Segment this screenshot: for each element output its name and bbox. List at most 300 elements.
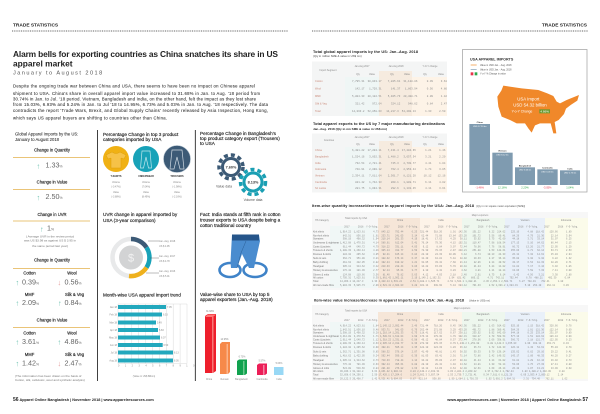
table 1: Qty <box>356 73 361 76</box>
heading: categories imported by USA <box>103 137 162 142</box>
change in value by fibre: ↓ <box>58 359 61 368</box>
table 2: Jan-Aug 2017 <box>355 136 370 139</box>
change in UVR: ↑ <box>40 224 44 234</box>
panel: India fact <box>200 212 281 277</box>
donut labels: Jan.-Aug. 2017 <box>159 255 176 258</box>
table 2: Y-O-Y change <box>423 136 438 139</box>
table 4: 2017 2018 Y-O-Ychg. 2017 2018 Y-O-Ychg. 2017 2018 Y-O-Ychg. 2017 2018 Y-O-Ychg. 2017 2018 Y-O-Ychg. 2017 2018 Y-O-Ychg. <box>340 319 578 322</box>
table title <box>313 50 418 58</box>
icon: value gear: 7.60% <box>226 166 237 170</box>
bar labels: USD 8.12 bn <box>496 155 509 157</box>
table 2: Cambodia <box>315 180 327 184</box>
legend: Value in USD Jan. - Aug. 2018 <box>480 64 512 67</box>
gear captions: Value data <box>216 184 232 188</box>
table 1 <box>312 62 447 116</box>
3D bar chart <box>205 310 284 381</box>
change in value by fibre: MMF <box>25 352 35 357</box>
intro paragraph: Despite the ongoing trade war between China and USA, there seems to have been no impact on Chinese apparel <box>13 84 255 88</box>
bar chart: 7.05 <box>167 306 172 309</box>
table 2: India <box>315 161 321 165</box>
table 4: Sweaters <box>313 332 324 334</box>
heading: Fact: India stands at fifth rank in cotton <box>200 212 281 217</box>
table 3: 508.19 498.32 1.94 210.14 201.33 4.19 18.41 17.62 4.29 38.11 35.92 5.75 42.60 44.18 3.71 33.14 31.07 6.25 <box>340 238 572 240</box>
table 4: Baby clothing <box>313 354 329 358</box>
category labels and figures: T-SHIRTS <box>111 175 122 178</box>
footnote: Cotton, silk, cellulosic, wool and synthetic analysis) <box>15 378 85 382</box>
table 3: Vietnam <box>521 219 529 222</box>
change in quantity by fibre: 0.56% <box>64 278 82 286</box>
change in value by fibre: Change in Value <box>37 318 68 322</box>
table 4: Underwear & nightwear <box>313 335 339 338</box>
bar chart: Aug 18 <box>109 360 118 362</box>
category labels and figures: Volume <box>112 181 121 184</box>
footnote: (The information has been drawn on the basis of <box>15 374 81 378</box>
change in quantity by fibre: Cotton <box>23 270 36 276</box>
table 4: 3,508.19 3,498.32 0.28 1,210.14 1,201.33 0.73 118.41 117.62 0.67 238.11 235.92 0.92 642.60 644.18 0.25 233.14 231.07 0.89 <box>340 332 572 334</box>
table 1: Wool <box>315 86 321 90</box>
bar chart: 8.13 <box>174 352 179 354</box>
table 4: 1,305.11 1,314.62 0.73 710.33 718.44 1.14 34.22 35.03 2.37 40.18 41.44 3.14 61.02 61.81 1.29 16.44 16.32 0.73 <box>340 359 572 362</box>
table 2: Bangladesh <box>315 154 329 158</box>
table 1: 5,804.33 20,122.51 5,925.73 20,408.71 2.09 1.42 <box>352 95 447 98</box>
change in quantity by fibre: 0.39% <box>22 278 39 286</box>
bar chart: Apr 18 <box>110 329 118 332</box>
change in quantity <box>13 148 90 170</box>
table 4: China <box>397 313 404 316</box>
left page header: TRADE STATISTICS <box>13 22 59 28</box>
table 3: 124.08 119.66 3.56 81.40 76.82 5.63 4.12 4.03 2.18 2.40 2.61 8.75 6.14 6.42 4.56 3.21 3.30 2.80 <box>340 274 572 276</box>
change in value by fibre: 3.61% <box>22 337 39 346</box>
table 2: 821.42 1,742.33 860.1 1,808.71 6.11 4.02 <box>352 181 446 184</box>
table 4: 776.42 781.30 0.63 392.14 395.61 0.88 28.10 28.41 1.10 14.62 14.81 1.30 52.14 53.06 1.76 27.33 27.11 0.80 <box>340 363 572 366</box>
table 1: 7,795.31 30,043.17 7,825.61 31,128.86 0.39 3.61 <box>352 80 447 83</box>
change in quantity: ↑ <box>36 162 40 170</box>
table 3: India <box>438 219 444 222</box>
category labels and figures <box>111 175 184 198</box>
table 1: Value <box>369 73 376 76</box>
change in value: Change in Value <box>37 180 68 184</box>
subtitle: January to August 2018 <box>13 70 104 76</box>
table 3: 7,795.31 7,825.61 0.39 1,861.42 1,902.11 2.19 1,140.2 1,162.31 1.94 821.42 860.12 4.71 742.11 792.44 6.78 488.21 492.30 0.84 <box>340 276 571 280</box>
table 2: Value <box>438 143 445 146</box>
bar chart: (Value in US$ Billion) <box>133 375 155 378</box>
table 3: Sweaters <box>313 238 324 240</box>
table 3: Dresses & skirts <box>313 253 332 256</box>
table 4: 4,914.22 4,823.61 1.84 2,145.12 2,092.44 2.46 721.44 718.20 0.45 542.36 551.22 1.63 914.62 925.10 1.15 318.42 320.66 0.70 <box>340 324 572 328</box>
change in value by fibre: Cotton <box>23 330 36 336</box>
table 3: All man-made fibre <box>313 284 335 287</box>
icon: blue rings <box>220 263 266 277</box>
table 2: 732.54 2,721.41 745.3 2,730.77 4.41 1.04 <box>352 162 446 165</box>
change in value by fibre: 2.47% <box>64 358 82 368</box>
table 3: 418.62 422.05 0.82 192.44 190.12 1.21 31.05 33.41 7.60 21.14 22.86 8.14 40.52 43.17 6.54 18.33 18.20 0.71 <box>340 261 572 264</box>
heading: Percentage Change in Bangladesh's <box>200 131 276 136</box>
table 2: Qty <box>423 143 428 146</box>
bar chart: Mar 18 <box>110 322 118 324</box>
table title: Total apparel exports to the US by 7 major manufacturing destinations <box>313 122 445 126</box>
bar labels: USD 2.73 bn <box>564 172 577 174</box>
change in quantity by fibre: ↓ <box>58 278 61 287</box>
panel dividers <box>98 130 195 381</box>
table 4: Major exporters <box>454 307 471 310</box>
table 3: Trousers & shorts <box>313 249 333 252</box>
table 1: 142.17 1,720.31 141.37 1,803.94 0.56 4.86 <box>352 88 447 90</box>
intro paragraph <box>13 84 269 120</box>
table 1: Value <box>438 73 445 76</box>
heading: apparel exporters (Jan.-Aug. 2018) <box>200 297 273 302</box>
bar percentage changes: 12.16% <box>498 185 507 189</box>
donut labels: Jan.-Aug. 2018 <box>159 240 176 243</box>
table 2: Indonesia <box>315 167 327 171</box>
change in UVR: Change in UVR <box>37 212 67 217</box>
table 3: 362.71 351.08 3.21 188.32 176.14 6.47 11.40 10.81 5.18 18.92 19.33 2.17 36.14 35.02 3.10 9.10 9.22 1.32 <box>340 257 572 260</box>
table 2: Countries <box>324 139 335 142</box>
table 3: 14,063.2 14,217.3 1.33 4,420.14 4,531.22 2.51 1,488.2 1,525.71 2.52 1,524.1 1,488.21 2.36 2,354.1 2,501.71 6.27 748.91 762.41 1.80 <box>340 280 564 283</box>
legend: Y-o-Y % Change in value <box>480 74 507 76</box>
change in UVR: 1% <box>47 224 54 232</box>
table title <box>313 122 445 131</box>
table 2: Value <box>369 143 376 146</box>
table 4: 2,611.44 2,640.72 1.12 1,318.22 1,331.11 0.98 49.12 48.84 0.57 272.44 278.06 2.06 358.91 366.72 2.18 121.77 122.05 0.23 <box>340 338 572 342</box>
change in value by fibre: 4.86% <box>64 337 82 346</box>
bar labels <box>473 122 577 174</box>
bar chart: Jan 18 <box>110 306 118 309</box>
table 4: Dresses & skirts <box>313 346 332 349</box>
bar labels: Cambodia <box>542 167 553 169</box>
intro paragraph: from 15.03%, 6.93% and 5.24% in Jan. to Jul '18 to 14.95%, 6.73% and 5.03% in Jan. to Aug. '18 respectively. The data <box>13 102 269 107</box>
icon: volume gear: 8.13% <box>248 180 259 184</box>
table block: total global imports <box>312 50 447 116</box>
category labels and figures: TROUSERS <box>170 175 184 178</box>
table 4: All cotton <box>313 370 324 373</box>
left footer: 56 Apparel Online Bangladesh | November 2018 | www.apparelresources.com <box>13 397 154 403</box>
3D bar chart: Cambodia <box>257 378 268 381</box>
category labels and figures: (-2.16%) <box>172 196 182 198</box>
table 2: Jan-Aug 2018 <box>389 136 404 139</box>
table 3 <box>312 212 588 290</box>
panel: month-wise imports <box>103 292 200 378</box>
table title: (Qty in million SME & value in US$ mn) <box>313 54 362 58</box>
change in UVR: the same period last year) <box>32 244 68 248</box>
table 1: Y-O-Y change <box>423 65 438 68</box>
map of USA: Y-o-Y Change <box>512 109 533 113</box>
table 4: Headgear <box>313 359 324 362</box>
right footer: www.apparelresources.com | November 2018 | Apparel Online Bangladesh 57 <box>446 397 588 403</box>
change in value by fibre: ↑ <box>16 338 19 346</box>
intro paragraph: which says US apparel buyers are shifting to countries other than China. <box>13 116 167 120</box>
table 2: 2,354.11 7,611.64 2,501.7 8,121.20 10.12 12.16 <box>352 174 446 178</box>
table 3: Indonesia <box>561 219 572 222</box>
table 4: 30,043.1 31,128.8 3.61 4,861.42 4,902.11 0.84 2,140.2 2,162.31 1.03 2,821.4 2,860.12 1.37 2,742.1 2,792.44 1.83 1,488.2 1,492.30 0.28 <box>340 370 565 373</box>
change in UVR: was US $3.98 as against US $ 3.95 in <box>24 238 76 242</box>
change in value by fibre: ↑ <box>16 359 19 368</box>
title: Alarm bells for exporting countries as China snatches its share in US <box>13 49 278 59</box>
table 2: Qty <box>356 143 361 146</box>
table 3: China <box>397 219 404 222</box>
table 3: 611.44 640.72 4.79 318.22 331.11 4.05 9.12 8.84 3.07 72.44 78.06 7.76 58.91 66.72 13.26 21.77 22.05 1.29 <box>340 246 572 248</box>
change in quantity by fibre <box>13 258 90 308</box>
table 3: Hosiery & accessories <box>313 269 338 272</box>
title: apparel market <box>13 58 73 68</box>
category labels and figures: (7.04%) <box>142 186 150 188</box>
category labels and figures: Volume <box>173 181 182 184</box>
panel: top 3 product categories <box>103 132 190 198</box>
legend <box>470 58 514 76</box>
bar labels: USD 3.03 bn <box>541 171 554 173</box>
table 1: Import Segment <box>319 69 337 72</box>
bar chart: 6.07 <box>161 336 166 340</box>
table 3: All cotton <box>313 276 324 280</box>
map of USA: USA Import <box>517 97 540 102</box>
table 4 <box>312 305 588 381</box>
table 3: 305.11 314.62 3.12 210.33 218.44 3.86 14.22 15.03 5.70 20.18 21.44 6.24 11.02 11.81 7.17 6.44 6.32 1.86 <box>340 265 572 268</box>
table block: item-wise quantity <box>312 204 588 290</box>
table 4: 52,858.6 54,290.1 2.50 17,420.1 17,204.6 1.24 3,602.3 3,657.54 1.53 2,730.7 2,721.41 0.34 7,611.6 8,121.20 6.69 2,953.4 2,890.12 2.14 <box>340 374 564 376</box>
table 1: Silk & Veg <box>315 102 327 106</box>
table 4: All man-made fibre <box>313 378 335 380</box>
bar chart: Jul 18 <box>111 352 118 354</box>
table 3: 176.42 181.30 2.77 92.14 95.61 3.77 8.10 8.41 3.83 4.62 4.81 4.11 12.14 13.06 7.58 7.33 7.11 3.00 <box>340 269 572 272</box>
table 3: 2017 2018 Y-O-Ychg. 2017 2018 Y-O-Ychg. 2017 2018 Y-O-Ychg. 2017 2018 Y-O-Ychg. 2017 2018 Y-O-Ychg. 2017 2018 Y-O-Ychg. <box>340 226 578 228</box>
donut labels: Jan.-Aug. 2016 <box>159 270 176 273</box>
table 3: 284.10 295.62 4.05 98.41 105.14 6.84 22.10 24.33 10.09 6.12 6.74 10.13 24.33 26.11 7.32 14.61 15.04 2.94 <box>340 253 572 256</box>
donut labels <box>146 240 176 278</box>
table 4: Total imports by USA <box>345 310 368 312</box>
table 1: Qty <box>423 73 428 76</box>
table 1: Jan-Aug 2018 <box>389 65 404 68</box>
table 1: 14,063.2 52,858.63 14,217.3 54,290.13 1.33 2.50 <box>352 110 446 113</box>
donut labels: US $ 5.01 <box>159 275 170 278</box>
change in quantity by fibre: Wool <box>67 270 77 276</box>
3D bar chart: 14.95% <box>220 338 229 341</box>
table 4: Vietnam <box>521 313 529 316</box>
icon: t-shirts circle <box>103 146 129 172</box>
category labels and figures: Value <box>113 191 120 194</box>
heading: UVR change in apparel imported by <box>103 212 177 217</box>
panel: USA apparel imports map <box>462 50 587 192</box>
right page header: TRADE STATISTICS <box>542 22 588 28</box>
bar chart: 6.50 <box>164 344 169 347</box>
table 4: Hosiery & accessories <box>313 363 338 366</box>
icon: underwear circle <box>133 146 159 172</box>
table 3: 842.51 856.10 1.61 233.71 241.05 3.14 62.44 71.08 13.84 153.20 161.72 5.56 80.41 84.26 4.79 21.30 22.14 3.94 <box>340 234 572 238</box>
change in value by fibre: Wool <box>67 330 77 336</box>
table 3: Total <box>313 280 319 283</box>
table 3: HS Category <box>315 219 330 222</box>
table title: Item-wise value increase/decrease in apparel imports by the USA: Jan.-Aug. 2018 <box>314 298 464 302</box>
panel: value-wise share <box>200 292 284 381</box>
3D bar chart: 5.03% <box>276 362 283 365</box>
intro paragraph: contradicts the report 'Trade Wars, Brexit, and Global Supply Chains' recently released by Asia Inspection, Hong Kong, <box>13 108 268 113</box>
change in quantity by fibre: ↑ <box>16 278 19 287</box>
title <box>13 49 278 68</box>
table 2: 1,524.16 3,602.31 1,488.2 3,657.54 3.21 2.20 <box>352 156 446 158</box>
table 3: 1,914.22 1,823.61 4.73 845.12 792.44 6.23 321.44 318.20 1.01 142.36 151.22 6.22 214.62 225.10 4.88 118.42 120.66 1.89 <box>340 230 572 234</box>
bar percentage changes: 2.20% <box>521 185 529 189</box>
table 4: 2,842.51 2,856.10 0.48 933.71 941.05 0.79 262.44 271.08 3.29 453.20 461.72 1.88 380.41 384.26 1.01 121.30 122.14 0.69 <box>340 328 572 332</box>
table 4: Coats & jackets <box>313 338 331 342</box>
table 2: China <box>315 148 322 152</box>
table 4: 1,418.62 1,422.05 0.24 592.44 590.12 0.39 81.05 83.41 2.91 71.14 72.86 2.42 140.52 143.17 1.89 48.33 48.20 0.27 <box>340 354 572 358</box>
change in quantity by fibre: ↑ <box>58 298 62 308</box>
table 3: 1,412.08 1,470.51 4.14 580.61 612.04 5.41 76.14 79.30 4.15 102.31 110.47 7.98 168.54 177.13 5.10 84.62 86.44 2.15 <box>340 242 572 244</box>
change in value: ↑ <box>36 193 40 202</box>
table 1: Value <box>404 73 411 76</box>
table 3: 1,208.33 1,260.14 4.29 305.14 312.77 2.50 72.30 70.15 2.97 240.21 251.08 4.53 142.61 155.03 8.71 62.14 63.71 2.53 <box>340 249 572 252</box>
table 1: 321.42 972.64 324.12 948.62 0.84 2.47 <box>352 102 447 106</box>
change in quantity by fibre: 0.84% <box>64 298 82 307</box>
table 3: Total imports by USA <box>345 217 368 220</box>
change in value by fibre: Silk & Veg <box>65 352 85 357</box>
3D bar chart: China <box>206 378 213 381</box>
map of USA <box>497 86 579 133</box>
bar chart: 8.05 <box>174 360 179 362</box>
table block: item-wise value <box>312 298 588 381</box>
bar percentage changes <box>475 185 574 189</box>
bar chart: May 18 <box>109 336 118 340</box>
table 2: Sri Lanka <box>315 186 327 190</box>
legend: Value in USD Jan. - Aug. 2018 <box>480 68 512 71</box>
intro paragraph: shipment to USA. China's share in overall apparel import value increased to 31.68% in Jan. to Aug. '18 period from <box>13 91 261 96</box>
intro paragraph: 30.74% in Jan. to Jul. '18 period. Vietnam, Bangladesh and India, on the other hand, felt the impact as they lost share <box>13 96 257 102</box>
category labels and figures: Value <box>143 191 150 194</box>
gear captions: Volume data <box>244 198 263 202</box>
donut chart: $ <box>128 252 134 264</box>
bar percentage changes: -3.05% <box>543 185 552 189</box>
change in quantity: 1.33% <box>46 160 63 170</box>
table title: (Value in US$ mn) <box>469 298 490 302</box>
table 4: Gloves & mitts <box>313 367 330 370</box>
heading: global apparel imports: January to August 2018 <box>15 137 60 142</box>
table title: Total global apparel imports by the US: Jan.-Aug. 2018 <box>313 50 418 54</box>
bar labels: Vietnam <box>498 150 507 153</box>
category labels and figures: UNDERWEAR <box>138 175 154 178</box>
heading: Percentage Change in top 3 product <box>103 132 178 137</box>
bars by exporter <box>469 124 580 185</box>
table 4: HS Category <box>315 313 330 316</box>
table block: exports by manufacturing destinations <box>312 122 447 192</box>
gear captions <box>216 184 263 202</box>
bar chart: 5.83 <box>159 329 164 332</box>
icon: trousers circle <box>164 146 190 172</box>
bar percentage changes: -1.46% <box>475 185 485 189</box>
table 3: Major exporters <box>472 214 489 217</box>
bar labels: China <box>477 122 483 124</box>
table title: (Qty in mn square meter equivalent [SME]) <box>476 204 525 208</box>
change in quantity by fibre: 2.09% <box>22 298 39 307</box>
table 4: 8,208.33 8,260.14 0.63 2,305.14 2,312.77 0.33 272.30 270.15 0.79 1,240.2 1,251.08 0.88 1,142.6 1,155.03 1.09 462.14 463.71 0.34 <box>340 342 569 345</box>
3D bar chart: 5.57% <box>259 360 266 362</box>
table 4: Knit shirts <box>313 324 325 328</box>
table 3: Suits & sets <box>313 257 327 260</box>
map of USA: USD 54.32 billion <box>513 102 547 107</box>
change in value by fibre <box>13 318 90 368</box>
bar chart <box>109 304 200 378</box>
table 3: Non-knit shirts <box>313 234 330 238</box>
table 4: India <box>438 313 444 316</box>
bar chart: Feb 18 <box>110 314 118 316</box>
category labels and figures: (-0.47%) <box>111 186 121 188</box>
change in quantity by fibre: ↑ <box>16 298 19 308</box>
bar chart: 012345678910 <box>118 364 200 368</box>
bar chart: Jun 18 <box>110 344 118 347</box>
table 1: Cotton <box>315 79 323 83</box>
table 2: 6,481.22 17,204.11 7,131.4 17,204.65 1.21 1.46 <box>352 149 446 152</box>
table 3: 5,804.33 5,925.73 2.09 2,521.41 2,604.03 3.28 321.14 338.60 5.44 684.12 701.33 2.52 1,601.2 1,684.31 5.19 254.40 262.11 3.03 <box>340 284 569 287</box>
heading: global apparel imports: Global Apparel Imports by the US: <box>15 132 78 136</box>
heading: Month-wise USA apparel import trend <box>103 292 181 298</box>
legend: USA APPAREL IMPORTS <box>470 58 514 62</box>
change in value: 2.50% <box>46 192 63 201</box>
panel: global apparel imports changes <box>13 132 90 382</box>
table 1: Total <box>315 109 321 113</box>
change in value by fibre: ↑ <box>58 338 61 346</box>
change in UVR <box>13 212 90 248</box>
bar labels: USD 17.20 bn <box>473 126 487 128</box>
table 4: Trousers & shorts <box>313 342 333 345</box>
change in quantity: Change in Quantity <box>34 148 71 152</box>
table 4: Non-knit shirts <box>313 328 330 332</box>
donut labels: US $ 4.78 <box>159 260 170 263</box>
bar labels: India <box>567 168 573 170</box>
3D bar chart: 31.68% <box>206 310 215 313</box>
table title: Jan.-Aug. 2018 (Qty in mn SME & value in US$ mn) <box>313 127 387 131</box>
table 2: 281.75 1,094.31 292.6 1,132.45 4.11 3.61 <box>352 187 446 190</box>
heading: trouser exports to USA despite being a <box>200 218 281 222</box>
table 3: Bangladesh <box>477 219 490 222</box>
table 3: Underwear & nightwear <box>313 242 339 244</box>
change in value <box>13 180 90 202</box>
table 3: Headgear <box>313 265 324 268</box>
change in UVR: ( Average UVR in the review period <box>26 234 74 238</box>
table 3: Knit shirts <box>313 230 325 234</box>
heading: Value-wise share to USA by top 5 <box>200 292 269 297</box>
3D bar chart: 6.73% <box>239 356 246 358</box>
3D bar chart: Bangladesh <box>235 378 248 381</box>
bar chart: 6.53 <box>163 314 168 316</box>
change in quantity by fibre: Silk & Veg <box>65 292 85 297</box>
table 2: Vietnam <box>315 174 324 178</box>
panel: UVR change <box>103 212 178 278</box>
category labels and figures: (-3.88%) <box>111 196 121 198</box>
table 3: Coats & jackets <box>313 246 331 248</box>
category labels and figures: (-1.98%) <box>172 186 182 188</box>
table 4: 524.08 519.66 0.84 281.40 276.82 1.63 14.12 14.03 0.64 12.40 12.61 1.69 26.14 26.42 1.07 13.21 13.30 0.68 <box>340 367 572 370</box>
table 3: Gloves & mitts <box>313 274 330 276</box>
map of USA: 4.86% <box>540 109 549 113</box>
3D bar chart: Vietnam <box>220 378 229 381</box>
3D bar chart: India <box>276 378 282 381</box>
change in quantity by fibre: MMF <box>25 292 35 297</box>
panel: Bangladesh trouser export <box>200 131 280 202</box>
table 4: 1,284.10 1,295.62 0.90 498.41 505.14 1.35 122.10 124.33 1.83 36.12 36.74 1.72 124.33 126.11 1.43 54.61 55.04 0.79 <box>340 346 572 349</box>
category labels and figures: (8.49%) <box>142 196 150 198</box>
bar labels: Bangladesh <box>519 165 532 167</box>
table 4: Bangladesh <box>477 313 490 316</box>
table 4: 3,412.08 3,470.51 1.71 1,580.61 1,612.04 1.99 176.14 179.30 1.79 302.31 310.47 2.70 568.54 577.13 1.51 184.62 186.44 0.99 <box>340 335 572 338</box>
heading: USA (3-year comparison) <box>103 218 156 223</box>
table 3: Baby clothing <box>313 261 329 264</box>
bar chart: 5.49 <box>157 322 162 324</box>
change in quantity by fibre: Change in Quantity <box>34 258 71 262</box>
table 2: Qty <box>390 143 395 146</box>
change in value by fibre: 1.42% <box>22 358 39 368</box>
table 4: Indonesia <box>561 313 572 316</box>
table 1: Qty <box>390 73 395 76</box>
table 1: MMF <box>315 94 321 98</box>
table 2: 748.91 2,890.12 762.4 2,953.44 1.74 3.05 <box>352 168 446 171</box>
heading: cotton traditional country <box>200 223 252 228</box>
